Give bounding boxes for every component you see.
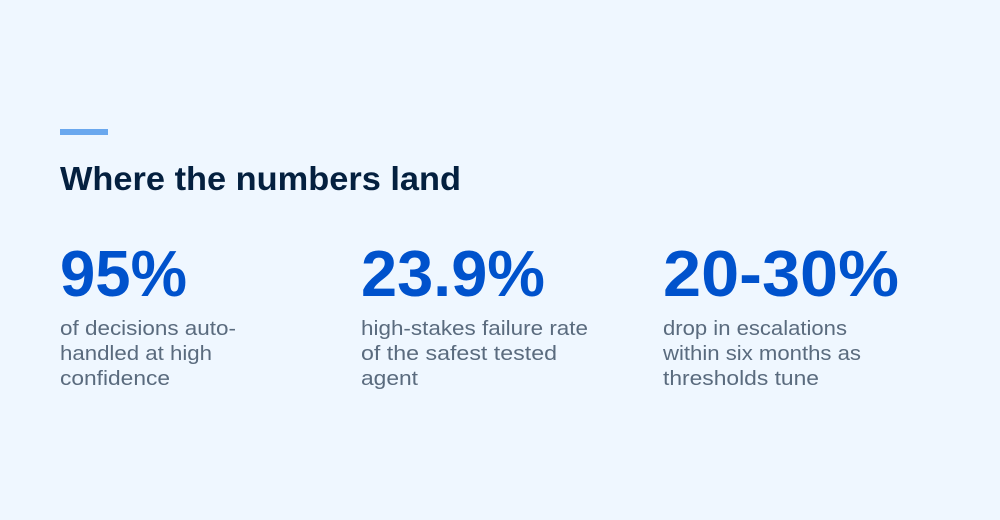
panel: 95% stat — [60, 237, 236, 390]
stat description: decisions auto-handled: of decisions auto- — [60, 318, 236, 340]
stat description: decisions auto-handled: confidence — [60, 368, 170, 390]
stat value: 20-30%: 20-30% — [663, 237, 899, 310]
stat value: 95%: 95% — [60, 237, 187, 310]
accent bar — [60, 129, 108, 135]
stat description: high-stakes failure rate: agent — [361, 368, 418, 390]
title: Where the numbers land — [60, 160, 461, 197]
stat description: drop in escalations — [662, 318, 861, 390]
stat description: high-stakes failure rate: high-stakes failure rate — [361, 318, 588, 340]
panel: 23.9% stat — [361, 237, 588, 390]
stat description: decisions auto-handled — [60, 318, 236, 390]
stat description: decisions auto-handled: handled at high — [60, 343, 212, 365]
panel: 20-30% stat — [662, 237, 899, 390]
stat description: drop in escalations: within six months as — [662, 343, 861, 365]
stat description: high-stakes failure rate — [361, 318, 588, 390]
stat description: high-stakes failure rate: of the safest tested — [361, 343, 557, 365]
stat description: drop in escalations: drop in escalations — [663, 318, 847, 340]
stat description: drop in escalations: thresholds tune — [663, 368, 819, 390]
stat value: 23.9%: 23.9% — [361, 237, 545, 310]
